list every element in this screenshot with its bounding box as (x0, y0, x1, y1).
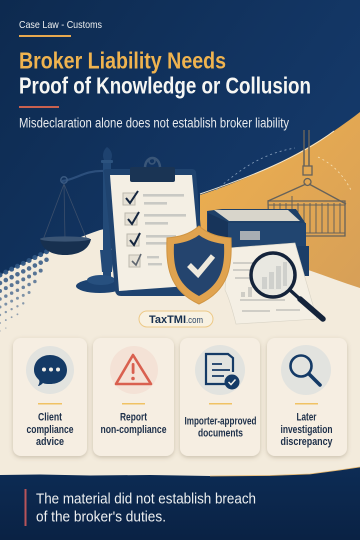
icon: scales of justice (40, 147, 124, 293)
subtitle: Misdeclaration alone does not establish broker liability (19, 116, 289, 130)
icon: magnifying glass (290, 356, 320, 385)
panel: card 1 client compliance advice: compliance (26, 424, 74, 436)
panel: card 4 later investigation discrepancy (267, 338, 347, 456)
beige lower background (0, 228, 360, 480)
panel: card 4 later investigation discrepancy: Later (296, 412, 317, 424)
gold wave band (200, 112, 360, 300)
callout: conclusion: of the broker's duties. (36, 510, 166, 526)
panel: card 1 client compliance advice: Client (38, 412, 62, 424)
icon: binder stack (207, 209, 309, 276)
icon: speech bubble (34, 355, 67, 386)
logo pill: TaxTMI (149, 314, 186, 326)
title: Broker Liability Needs (19, 48, 226, 74)
navy background (0, 0, 360, 300)
panel: card 1 client compliance advice: advice (36, 436, 64, 448)
footer band (0, 467, 360, 540)
panel: card 2 report non-compliance: non-compliance (100, 424, 166, 436)
dashed route lines (216, 148, 352, 192)
callout: conclusion (24, 489, 256, 526)
eyebrow label: Case Law - Customs (19, 19, 102, 31)
icon: hanging cargo container (268, 130, 346, 236)
icon: warning triangle (116, 355, 151, 384)
panel: card 2 report non-compliance (93, 338, 174, 456)
icon: clipboard checklist (104, 158, 206, 296)
panel: card 4 later investigation discrepancy: discrepancy (280, 436, 333, 448)
panel: card 3 importer-approved documents (180, 338, 260, 456)
logo pill: .com (186, 315, 203, 326)
checklist rows (123, 191, 186, 267)
icon: document with magnifier (225, 243, 323, 324)
callout: conclusion: The material did not establish breach (36, 492, 256, 508)
panel: card 1 client compliance advice (13, 338, 87, 456)
icon: shield with check (167, 226, 231, 304)
logo pill (139, 311, 213, 327)
halftone pattern (0, 248, 55, 331)
panel: card 3 importer-approved documents: documents (198, 428, 243, 440)
panel: card 3 importer-approved documents: Importer-approved (184, 416, 256, 428)
title (19, 48, 311, 98)
icon: document with check badge (206, 354, 240, 390)
panel: card 2 report non-compliance: Report (120, 412, 147, 424)
panel: card 4 later investigation discrepancy: investigation (280, 424, 333, 436)
